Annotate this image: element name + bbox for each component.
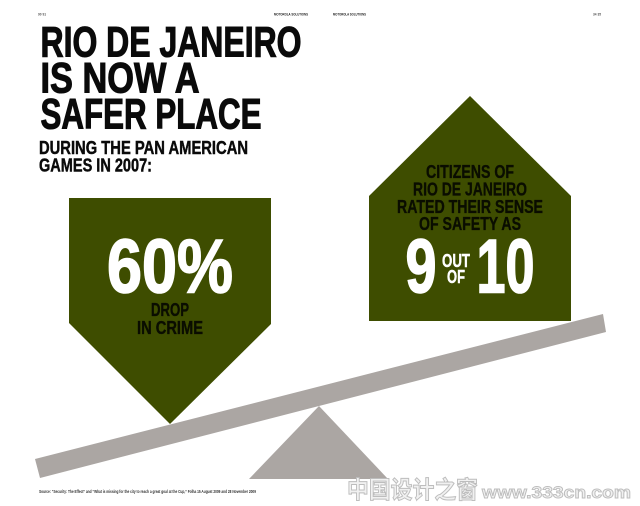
title: IS NOW A xyxy=(40,56,200,102)
page header: 34 35 xyxy=(593,12,602,16)
page header: MOTOROLA SOLUTIONS xyxy=(274,12,308,16)
title xyxy=(40,20,302,138)
label: citizens rated safety: OF SAFETY AS xyxy=(419,214,521,234)
stat: 9 out of 10: OF xyxy=(447,267,465,287)
label: citizens rated safety: RATED THEIR SENSE xyxy=(397,197,543,217)
label: drop in crime xyxy=(137,300,203,338)
page header: 90 91 xyxy=(38,12,47,16)
watermark: 中国设计之窗 xyxy=(347,476,478,504)
subtitle xyxy=(39,138,248,176)
seesaw fulcrum xyxy=(249,406,388,479)
stat: 9 out of 10: 10 xyxy=(476,224,534,310)
page header xyxy=(38,12,602,16)
watermark xyxy=(347,476,631,504)
watermark: www.333cn.com xyxy=(481,483,631,502)
stat: 9 out of 10 xyxy=(406,224,534,310)
title: SAFER PLACE xyxy=(40,92,262,138)
label: citizens rated safety xyxy=(397,162,543,234)
label: citizens rated safety: RIO DE JANEIRO xyxy=(413,180,527,200)
title: RIO DE JANEIRO xyxy=(40,20,302,66)
seesaw beam xyxy=(35,314,606,478)
page header: MOTOROLA SOLUTIONS xyxy=(333,12,366,16)
label: drop in crime: DROP xyxy=(151,300,189,320)
panel: 60% drop in crime arrow xyxy=(69,198,271,424)
stat: 9 out of 10: OUT xyxy=(442,251,470,271)
stat: 60%: 60% xyxy=(107,224,233,310)
label: drop in crime: IN CRIME xyxy=(137,318,203,338)
label: citizens rated safety: CITIZENS OF xyxy=(426,162,514,182)
panel: citizens rating house xyxy=(369,96,571,321)
source note: Source: “Security: The Effect” and “What is missing for the city to reach a great goal at the Cup,” Folha 15 August 2009 and 28 November 2009 xyxy=(39,489,256,494)
subtitle: GAMES IN 2007: xyxy=(39,156,152,176)
subtitle: DURING THE PAN AMERICAN xyxy=(39,138,248,158)
stat: 9 out of 10: 9 xyxy=(406,224,436,310)
